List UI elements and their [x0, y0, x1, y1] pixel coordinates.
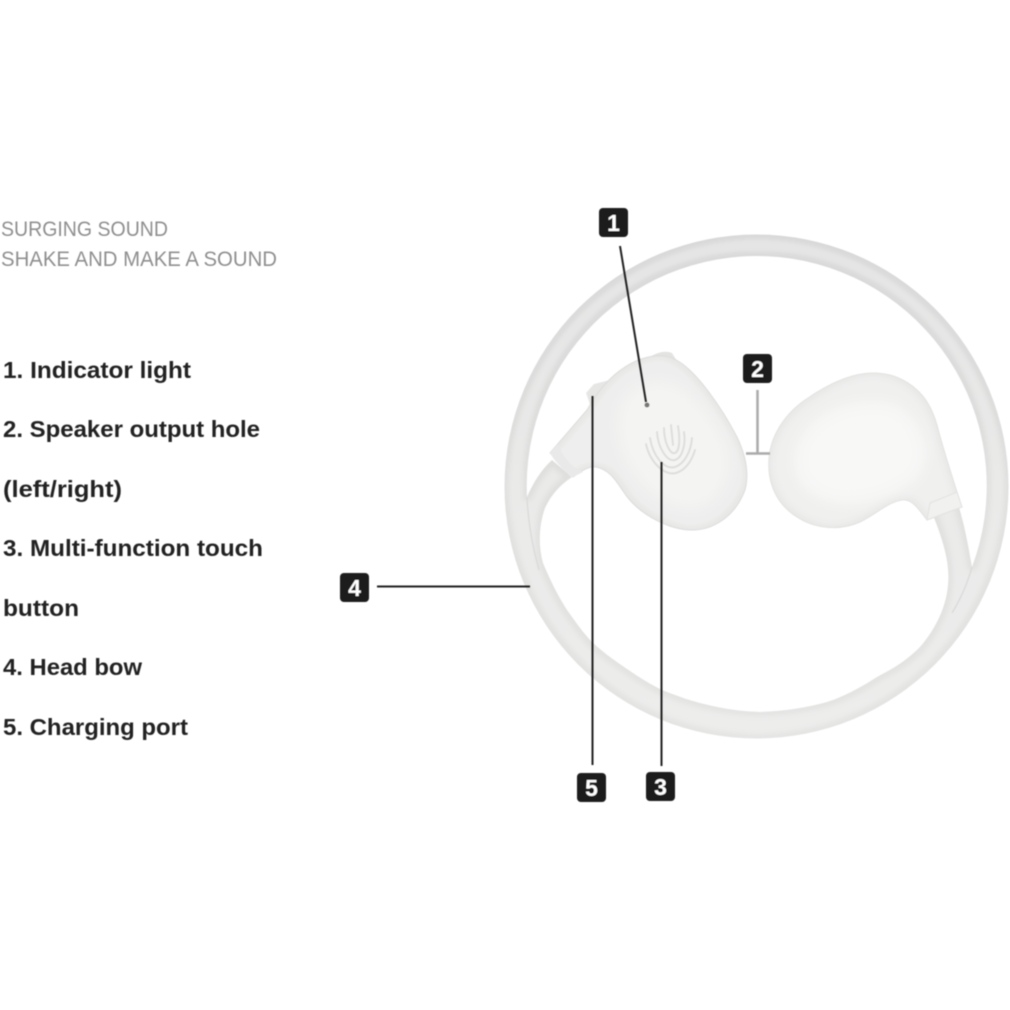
badge 2: 2: [751, 356, 764, 382]
right earbud: [769, 373, 962, 528]
badge 3: 3: [654, 774, 667, 800]
badge 4: 4: [348, 575, 361, 601]
parts list: 2. Speaker output hole: [3, 416, 260, 442]
line to speaker holes: [746, 390, 770, 454]
leader lines: [377, 246, 770, 766]
parts list: 5. Charging port: [3, 714, 188, 740]
badge 3: [646, 772, 675, 801]
line to charging port: [592, 396, 594, 765]
badge 4: [340, 573, 369, 602]
subtitle text: [1, 218, 277, 271]
parts list: 3. Multi-function touch: [3, 535, 263, 561]
parts list: (left/right): [3, 476, 122, 502]
line to touch button: [660, 462, 662, 766]
line to head bow: [377, 586, 530, 588]
subtitle text: SHAKE AND MAKE A SOUND: [1, 248, 277, 271]
head bow with inner cables: [504, 235, 1008, 739]
parts list: 1. Indicator light: [3, 357, 191, 383]
badge 1: 1: [607, 210, 620, 236]
badge 2: [743, 354, 772, 383]
headset illustration: [504, 235, 1008, 739]
callout badges: [340, 208, 772, 802]
badge 1: [599, 208, 628, 237]
parts list: [3, 357, 263, 740]
line to indicator light: [620, 246, 646, 402]
left earbud: [550, 352, 747, 530]
parts list: 4. Head bow: [3, 654, 142, 680]
indicator light: [644, 402, 650, 408]
subtitle text: SURGING SOUND: [1, 218, 168, 241]
badge 5: 5: [585, 775, 598, 801]
parts list: button: [3, 595, 79, 621]
badge 5: [577, 773, 606, 802]
icon: fingerprint touch button: [646, 425, 695, 473]
